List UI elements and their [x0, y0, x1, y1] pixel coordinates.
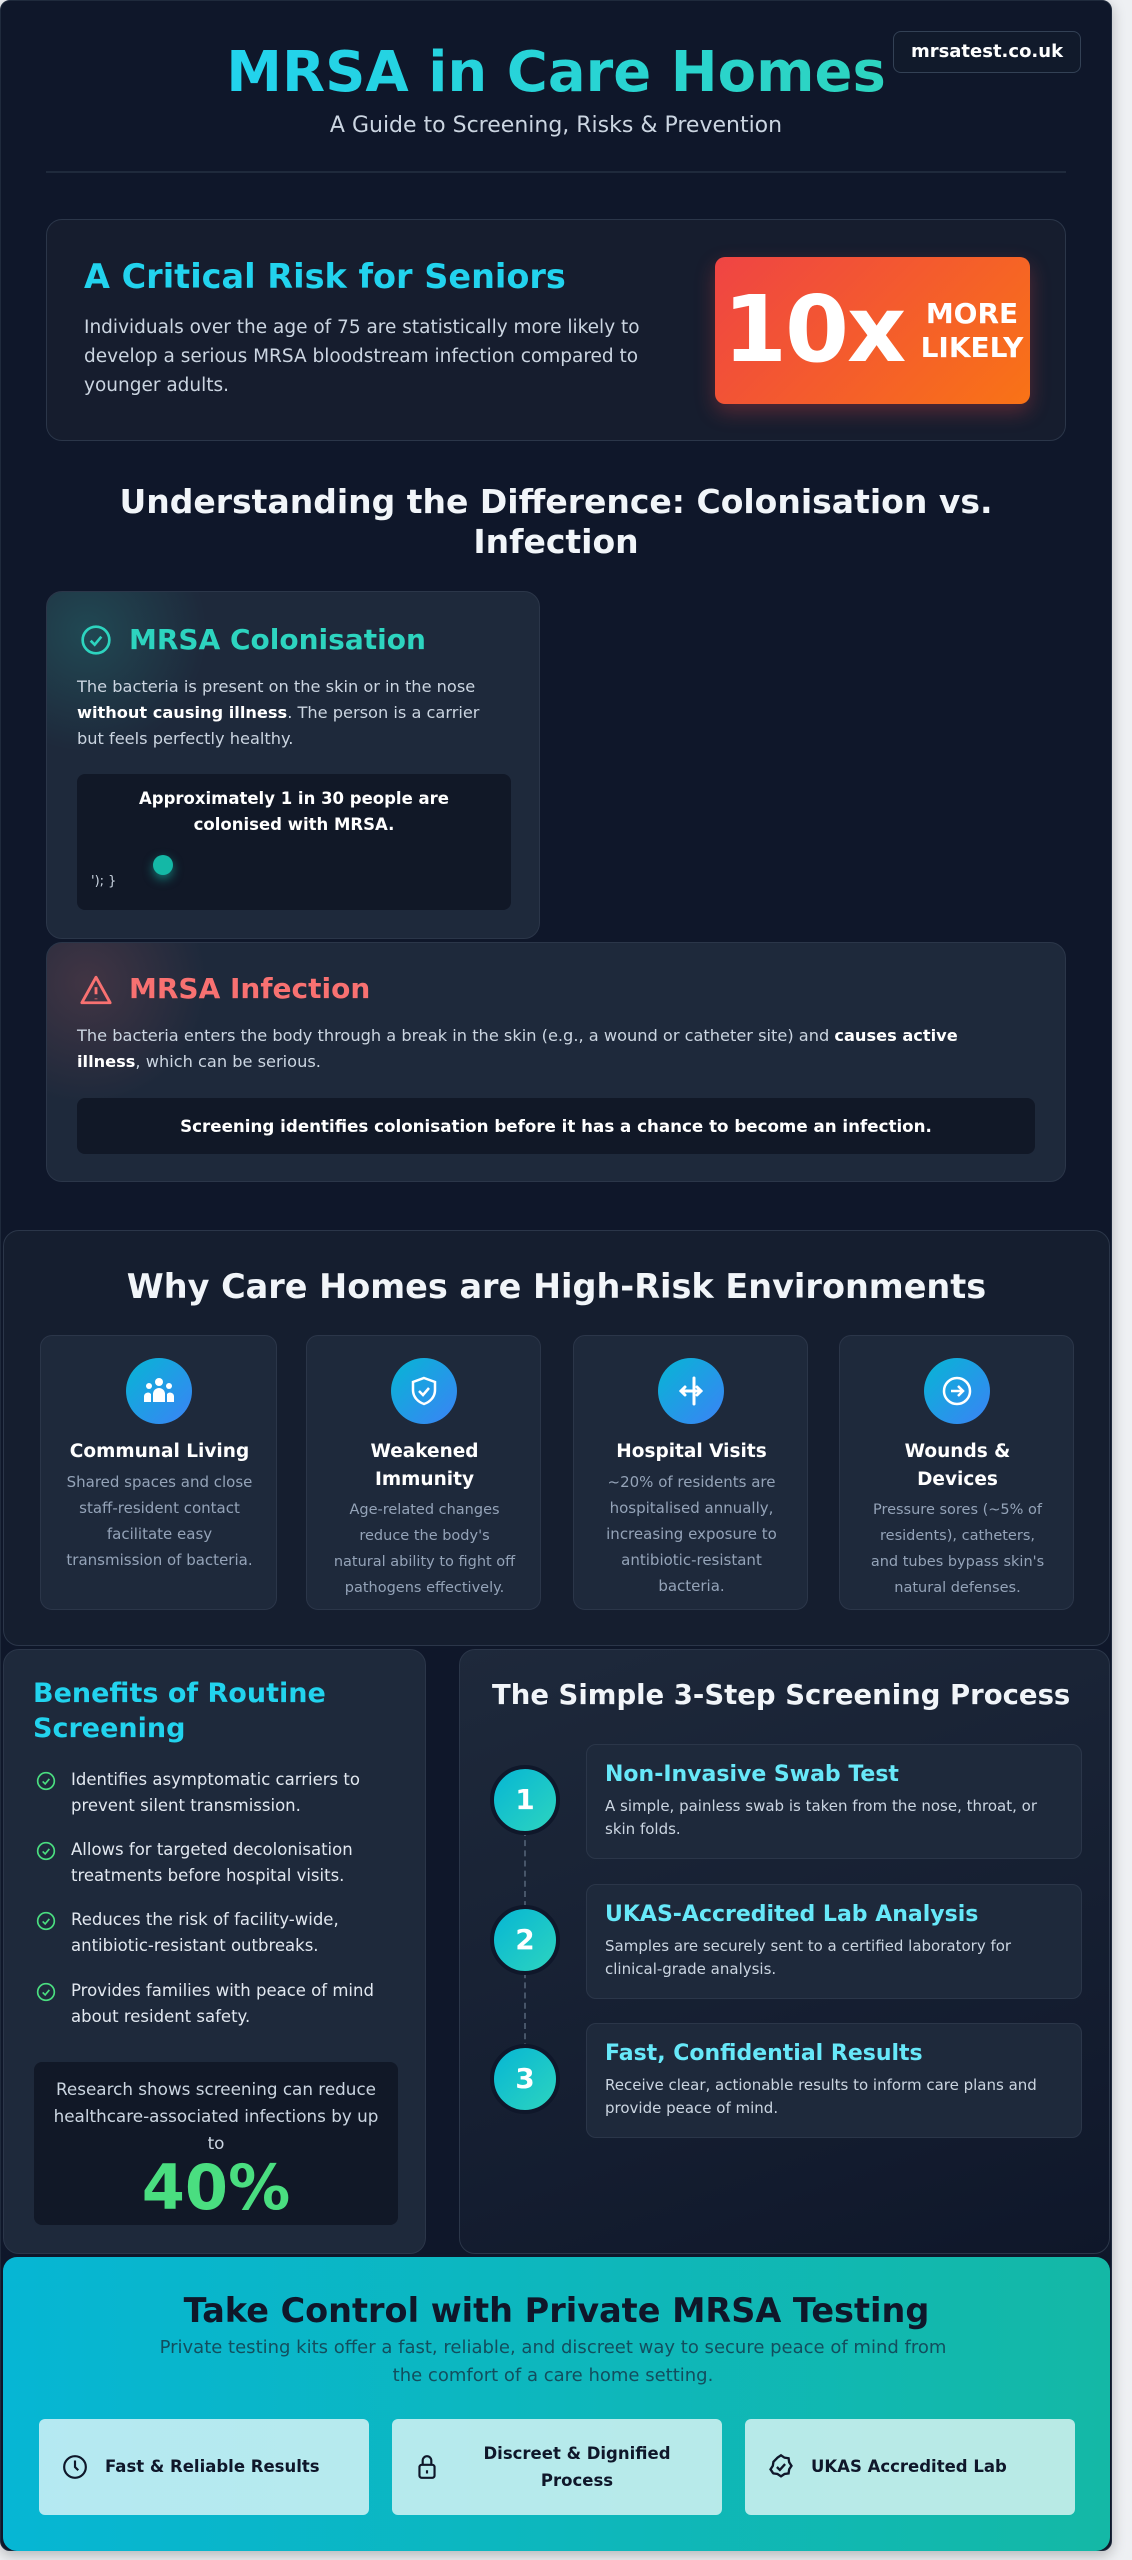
card: hospital visits: [573, 1335, 808, 1610]
card: weakened immunity: pathogens effectively.: [345, 1580, 504, 1596]
step 3: [490, 2023, 1082, 2138]
heading: MRSA Colonisation: MRSA Colonisation: [129, 623, 426, 656]
heading: why care homes: Why Care Homes are High-Risk Environments: [127, 1267, 986, 1306]
feature: fast results: [39, 2419, 369, 2515]
stat: 10x more likely: 10x: [723, 276, 904, 383]
list: benefits: [36, 1770, 374, 2026]
panel: high-risk environments: [3, 1230, 1110, 1646]
step 1: Non-Invasive Swab Test: [605, 1762, 899, 1787]
step 2: Samples are securely sent to a certified laboratory for clinical-grade analysis.: [605, 1937, 1011, 1978]
stat: 10x more likely: MORE: [926, 297, 1018, 330]
icon: arrow circle: [924, 1358, 990, 1424]
card: wounds & devices: [839, 1335, 1074, 1610]
callout: 1 in 30: Approximately 1 in 30 people are colonised with MRSA.: [139, 789, 449, 834]
step 2: UKAS-Accredited Lab Analysis: [605, 1902, 978, 1927]
heading: process: The Simple 3-Step Screening Process: [492, 1679, 1070, 1711]
card: weakened immunity: natural ability to fight off: [334, 1554, 515, 1570]
icon: check circle: [81, 625, 111, 655]
card: wounds & devices: residents), catheters,: [880, 1528, 1035, 1544]
panel: benefits: [3, 1649, 426, 2254]
panel: infection: [46, 942, 1066, 1182]
step 3: Receive clear, actionable results to inform care plans and provide peace of mind.: [605, 2076, 1037, 2117]
feature: discreet process: Discreet & Dignified Process: [483, 2444, 671, 2490]
step 1: [490, 1744, 1082, 1859]
step 2: [490, 1884, 1082, 1999]
panel: 3-step process: [459, 1649, 1110, 2254]
feature: fast results: Fast & Reliable Results: [105, 2457, 320, 2476]
card: communal living: Shared spaces and close staff-resident contact facilitate easy transmission of bacteria.: [66, 1473, 253, 1569]
list: benefits: Reduces the risk of facility-wide, antibiotic-resistant outbreaks.: [71, 1910, 339, 1955]
text: colonisation description: The bacteria is present on the skin or in the nose without causing illness. The person is a carrier but feels perfectly healthy.: [77, 677, 479, 748]
stat: 10x more likely: LIKELY: [921, 331, 1023, 364]
card: wounds & devices: Wounds &: [905, 1441, 1010, 1462]
card: weakened immunity: reduce the body's: [359, 1528, 490, 1544]
panel: colonisation: [46, 591, 540, 939]
callout: 40%: Research shows screening can reduce healthcare-associated infections by up to: [54, 2079, 378, 2153]
subtitle: A Guide to Screening, Risks & Prevention: [330, 113, 782, 138]
text: infection description: The bacteria enters the body through a break in the skin (e.g., a wound or catheter site) and causes active illness, which can be serious.: [77, 1026, 958, 1071]
heading: take control: Take Control with Private MRSA Testing: [184, 2291, 929, 2330]
icon: arrows: [658, 1358, 724, 1424]
card: weakened immunity: Age-related changes: [349, 1502, 500, 1518]
list: benefits: Provides families with peace of mind about resident safety.: [71, 1981, 374, 2026]
callout: 40%: 40%: [142, 2151, 290, 2224]
list: benefits: Identifies asymptomatic carriers to prevent silent transmission.: [71, 1770, 360, 1815]
feature: UKAS lab: UKAS Accredited Lab: [811, 2457, 1007, 2476]
stat: 10x more likely: [715, 257, 1030, 404]
callout: 40%: [34, 2062, 398, 2225]
card: communal living: [40, 1335, 277, 1610]
icon: people: [126, 1358, 192, 1424]
icon: shield: [391, 1358, 457, 1424]
text: cta description: Private testing kits offer a fast, reliable, and discreet way to secure peace of mind from the comfort of a care home setting.: [160, 2337, 946, 2386]
callout: screening identifies: Screening identifies colonisation before it has a chance to become an infection.: [180, 1116, 932, 1136]
card: weakened immunity: [306, 1335, 541, 1610]
step 3: Fast, Confidential Results: [605, 2041, 923, 2066]
card: communal living: Communal Living: [70, 1441, 249, 1462]
card: wounds & devices: Devices: [917, 1469, 998, 1490]
card: hospital visits: Hospital Visits: [616, 1441, 767, 1462]
callout: 1 in 30: [77, 774, 511, 910]
list: benefits: Allows for targeted decolonisation treatments before hospital visits.: [71, 1840, 353, 1885]
step 1: 1: [515, 1783, 535, 1816]
card: hospital visits: ~20% of residents are hospitalised annually, increasing exposure to antibiotic-resistant bacteria.: [606, 1473, 777, 1595]
heading: benefits: Benefits of Routine Screening: [33, 1678, 326, 1744]
card: weakened immunity: Weakened: [370, 1441, 479, 1462]
icon: warning: [80, 976, 112, 1004]
card: wounds & devices: natural defenses.: [894, 1580, 1021, 1596]
feature: discreet process: [392, 2419, 722, 2515]
step 1: A simple, painless swab is taken from the nose, throat, or skin folds.: [605, 1797, 1037, 1838]
callout: screening identifies: [77, 1098, 1035, 1154]
card: wounds & devices: and tubes bypass skin's: [871, 1554, 1044, 1570]
panel: critical risk: [46, 219, 1066, 441]
badge: mrsatest.co.uk: mrsatest.co.uk: [911, 41, 1063, 62]
heading: critical risk: A Critical Risk for Seniors: [84, 257, 566, 296]
card: wounds & devices: Pressure sores (~5% of: [873, 1502, 1042, 1518]
callout: 1 in 30: '); }: [91, 874, 116, 889]
feature: UKAS lab: [745, 2419, 1075, 2515]
title: MRSA in Care Homes: [226, 40, 886, 105]
badge: mrsatest.co.uk: [893, 31, 1081, 73]
step 3: 3: [515, 2062, 535, 2095]
panel: call to action: [3, 2257, 1110, 2551]
heading: colonisation vs infection: Understanding the Difference: Colonisation vs. Infection: [119, 482, 993, 561]
step 2: 2: [515, 1923, 535, 1956]
heading: MRSA Infection: MRSA Infection: [129, 972, 370, 1005]
card: weakened immunity: Immunity: [375, 1469, 474, 1490]
text: risk description: Individuals over the age of 75 are statistically more likely to develop a serious MRSA bloodstream infection compared to younger adults.: [84, 317, 640, 396]
